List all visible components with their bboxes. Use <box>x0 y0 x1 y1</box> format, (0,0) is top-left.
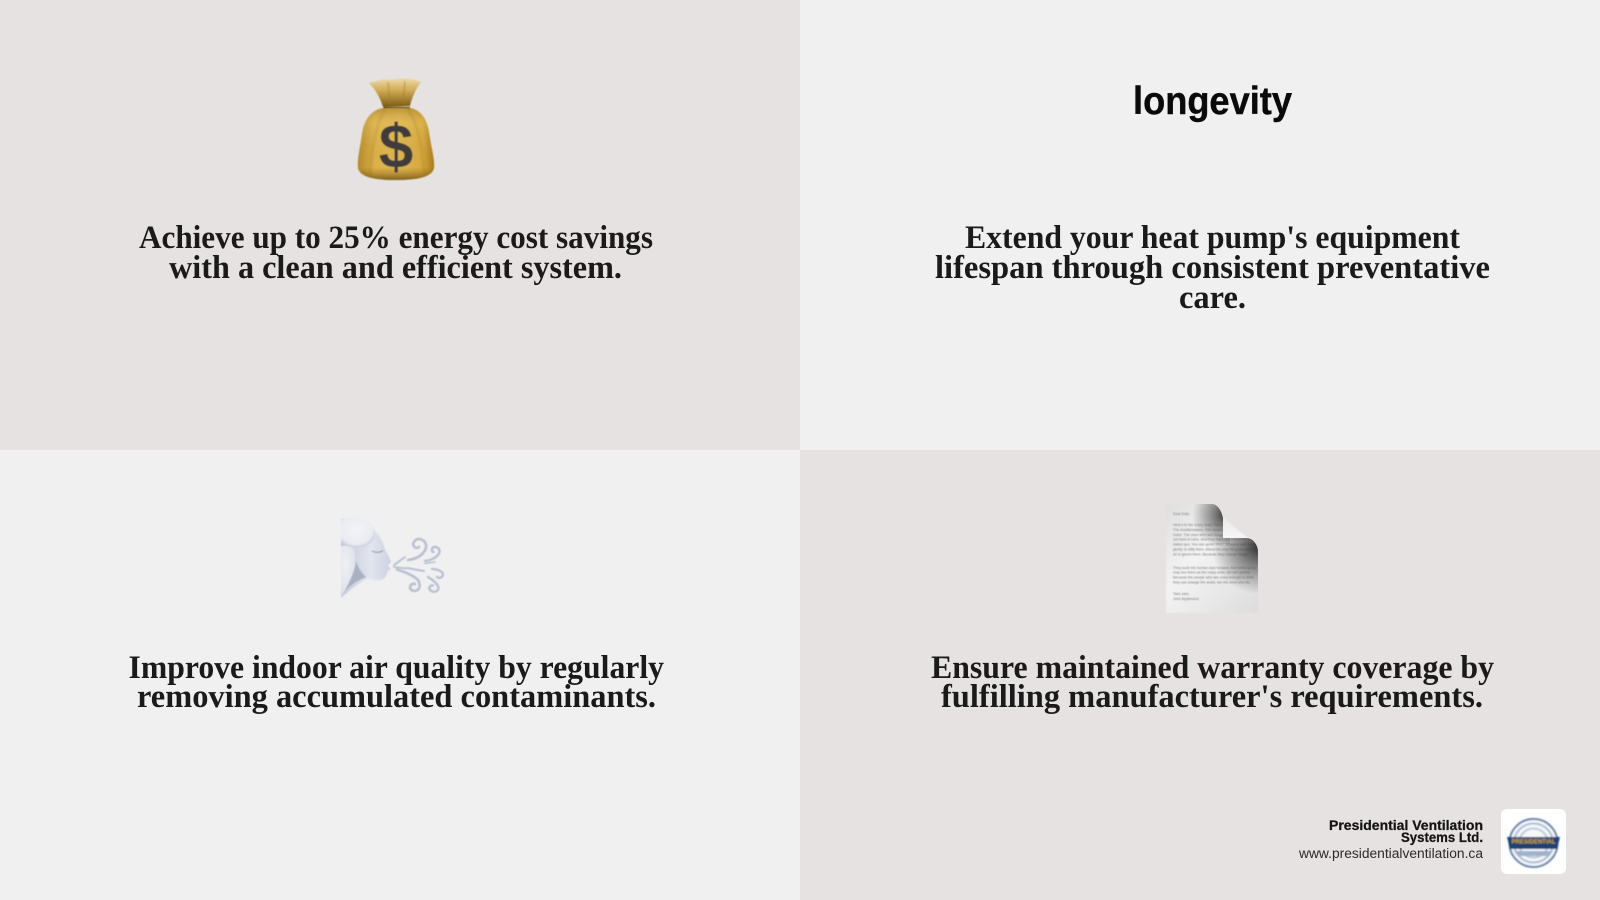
heading: air quality text: Improve indoor air quality by regularly <box>128 650 664 686</box>
document letter text: do is ignore them. Because they change things. <box>1173 552 1249 556</box>
document letter text: they can change the world, are the ones who do. <box>1173 580 1251 584</box>
heading: air quality text: removing accumulated contaminants. <box>137 679 656 715</box>
document letter text: Take care, <box>1173 592 1190 596</box>
document letter text: They push the human race forward. And while some <box>1173 566 1256 570</box>
heading: longevity text <box>935 220 1490 316</box>
icon: dollar sign: $ <box>379 113 413 182</box>
icon: money bag <box>358 78 434 182</box>
icon: curled document <box>1166 500 1261 613</box>
icon: wind face <box>341 517 443 598</box>
logo: company badge <box>1501 809 1566 874</box>
logo: company badge: PRESIDENTIAL <box>1512 838 1556 846</box>
document letter text: The troublemakers. The round pegs in the square <box>1173 528 1252 532</box>
heading: longevity text: Extend your heat pump's equipment <box>965 220 1460 256</box>
panel: warranty <box>800 450 1600 900</box>
heading: energy savings text: with a clean and efficient system. <box>169 250 622 286</box>
footer: company name and website: Presidential Ventilation <box>1329 818 1483 833</box>
document letter text: Because the people who are crazy enough to think <box>1173 576 1254 580</box>
document letter text: holes. The ones who see things differently. They're <box>1173 533 1254 537</box>
document letter text: Here's to the crazy ones. The misfits. The rebels. <box>1173 523 1251 527</box>
footer: company name and website: www.presidentialventilation.ca <box>1298 846 1483 861</box>
document letter text: may see them as the crazy ones, we see genius. <box>1173 570 1251 574</box>
footer: company name and website <box>1298 818 1483 861</box>
panel: air quality <box>0 450 800 900</box>
heading: warranty text <box>931 650 1494 715</box>
document letter text <box>1173 512 1257 601</box>
heading: longevity text: care. <box>1179 280 1246 316</box>
heading: air quality text <box>128 650 664 715</box>
icon: wind swirls <box>394 539 443 592</box>
panel: longevity <box>800 0 1600 450</box>
heading: energy savings text <box>139 220 653 286</box>
heading: energy savings text: Achieve up to 25% energy cost savings <box>139 220 653 256</box>
heading: longevity text: lifespan through consistent preventative <box>935 250 1490 286</box>
footer: company name and website: Systems Ltd. <box>1401 830 1483 845</box>
document letter text: John Appleseed <box>1173 597 1199 601</box>
document letter text: Dear Kate, <box>1173 512 1190 516</box>
heading: warranty text: Ensure maintained warranty coverage by <box>931 650 1494 686</box>
document letter text: not fond of rules. And they have no respect for the <box>1173 538 1253 542</box>
document letter text: glorify or vilify them. About the only thing you can't <box>1173 548 1253 552</box>
panel: energy savings <box>0 0 800 450</box>
heading: warranty text: fulfilling manufacturer's requirements. <box>941 679 1483 715</box>
label: longevity word: longevity <box>1133 80 1292 123</box>
document letter text: status quo. You can quote them, disagree with them, <box>1173 542 1257 546</box>
